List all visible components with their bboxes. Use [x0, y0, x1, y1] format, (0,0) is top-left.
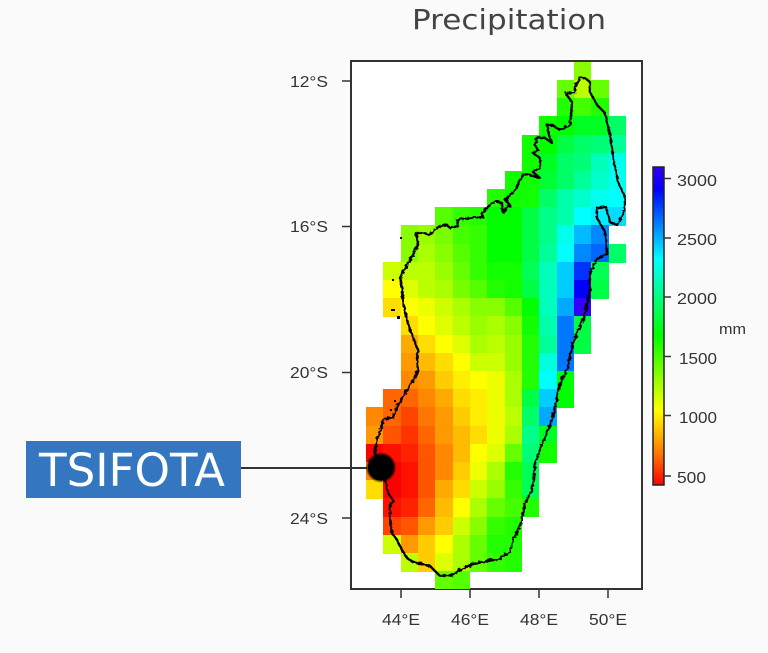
- colour bar labels: 2000: [677, 291, 717, 308]
- longitude axis labels: 50°E: [589, 612, 627, 629]
- longitude axis labels: 48°E: [520, 612, 558, 629]
- colour bar labels: 500: [677, 470, 706, 487]
- colour bar labels: 1500: [679, 351, 717, 368]
- latitude axis labels: 16°S: [290, 219, 328, 236]
- marker: Tsifota location: [366, 452, 396, 483]
- small west coast islands: [390, 237, 402, 411]
- latitude axis labels: 12°S: [290, 74, 328, 91]
- title: Precipitation: [412, 3, 606, 36]
- longitude axis ticks: [401, 589, 608, 598]
- colour bar legend: [653, 167, 671, 485]
- colour bar labels: 1000: [679, 410, 717, 427]
- unit label: mm: [719, 321, 746, 338]
- latitude axis labels: 20°S: [290, 365, 328, 382]
- colour bar labels: 3000: [677, 173, 717, 190]
- location label: TSIFOTA: TSIFOTA: [38, 444, 225, 497]
- longitude axis labels: [382, 612, 627, 629]
- longitude axis labels: 44°E: [382, 612, 420, 629]
- colour bar labels: 2500: [677, 232, 717, 249]
- longitude axis labels: 46°E: [451, 612, 489, 629]
- colour bar labels: [677, 173, 717, 487]
- leader line: [241, 467, 367, 469]
- panel: map frame: [350, 60, 643, 590]
- latitude axis ticks: [342, 81, 351, 518]
- coastline of Madagascar: [375, 78, 625, 576]
- latitude axis labels: 24°S: [290, 511, 328, 528]
- latitude axis labels: [290, 74, 328, 528]
